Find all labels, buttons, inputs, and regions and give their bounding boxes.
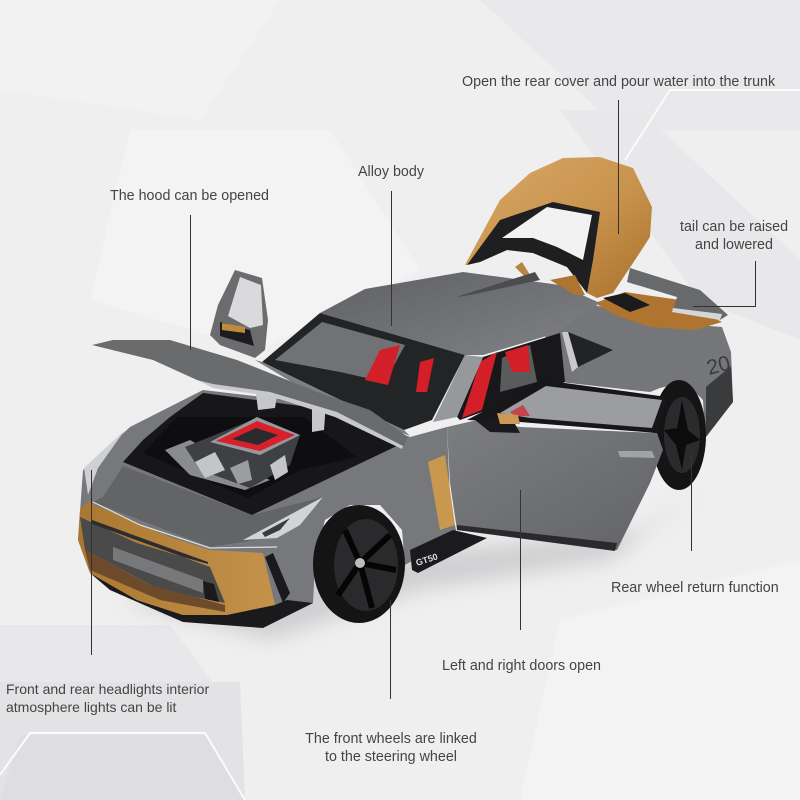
rear stripe and number [706,366,733,437]
open hood [92,340,408,449]
ground shadow [120,490,700,640]
label: headlights: Front and rear headlights interior [6,681,209,697]
label: tail: tail can be raised [680,219,788,235]
label: alloy body: Alloy body [358,164,424,180]
label: hood: The hood can be opened [110,188,269,204]
side window rear [568,332,613,367]
car [78,157,733,640]
label: front wheels [305,731,477,765]
front wheel [313,505,405,623]
callout line: alloy body [391,191,392,326]
label: doors: Left and right doors open [442,658,601,674]
callout line: doors [520,490,521,630]
door opening interior [457,333,565,420]
callout line: tail horizontal [693,306,756,307]
callout line: rear cover [618,100,619,234]
gold door stripe [428,455,455,530]
label: tail [680,219,788,253]
front body [78,390,457,627]
hood front white edge [93,502,277,548]
headlight right [243,497,323,540]
car: 20 [704,352,733,380]
rocker with badge [410,530,487,573]
rocker with badge: GT50 [415,551,439,568]
callout line: front wheels [390,600,391,699]
label: front wheels: to the steering wheel [325,749,457,765]
rear deck interior [595,292,722,330]
label: headlights [6,681,209,715]
label: rear wheel: Rear wheel return function [611,580,779,596]
rear wheel [652,380,706,490]
callout line: hood [190,215,191,350]
rear cover open [456,157,652,298]
left open door [210,270,268,358]
under-bumper dark [90,573,313,628]
windshield [255,313,483,436]
right open door [447,380,667,551]
hood top panel [93,466,323,547]
rear body [540,300,733,435]
callout line: tail vertical [755,261,756,307]
fender slit [265,553,290,603]
label: tail: and lowered [695,237,773,253]
headlight left [84,430,125,495]
label: headlights: atmosphere lights can be lit [6,699,176,715]
callout line: headlights [91,470,92,655]
spoiler [627,268,728,320]
label: rear cover: Open the rear cover and pour water into the trunk [462,74,775,90]
callout line: rear wheel [691,450,692,551]
roof [320,272,600,355]
label: front wheels: The front wheels are linked [305,731,477,747]
front grille [80,517,225,612]
engine bay [123,385,403,515]
gold bumper [78,500,275,615]
